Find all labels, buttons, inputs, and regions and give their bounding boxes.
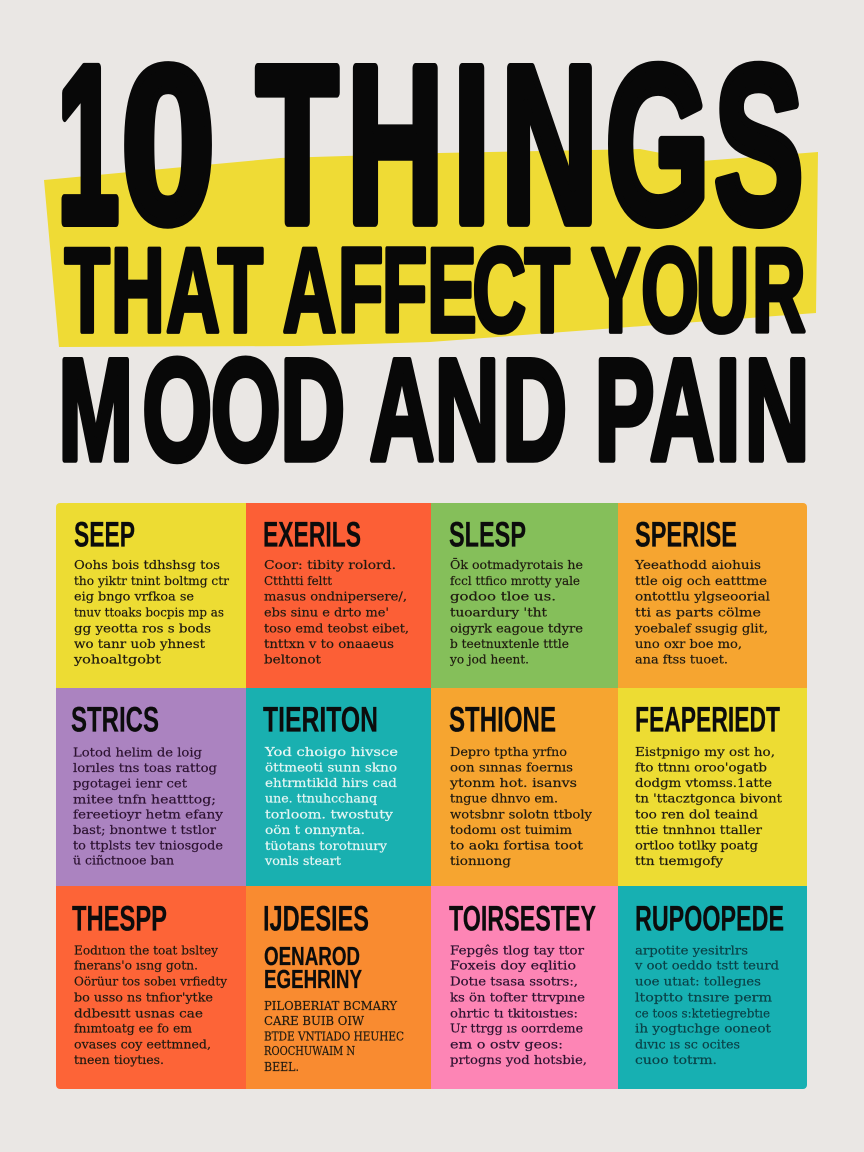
- subheading: oenarod egehriny: OENAROD: [264, 941, 360, 971]
- body text: idesies: BEEL.: [264, 1059, 299, 1074]
- body text: thespp: fnerans'o ısng gotn.: [74, 958, 198, 973]
- title line 1: 1: [57, 20, 119, 270]
- body text: strics: [73, 745, 224, 867]
- body text: strics: bast; bnontwe t tstlor: [73, 822, 216, 837]
- panel: toirsestey: [431, 886, 618, 1089]
- body text: tieriton: une. ttnuhcchanq: [265, 790, 377, 805]
- heading: idesies: IJDESIES: [263, 898, 369, 938]
- body text: thespp: tneen tioytıes.: [74, 1052, 164, 1067]
- panel: seep: [56, 503, 246, 688]
- body text: rupoopede: [634, 942, 779, 1067]
- body text: slesp: oigyrk eagoue tdyre: [450, 620, 583, 635]
- body text: exerils: [264, 557, 409, 666]
- body text: idesies: CARE BUIB OIW: [264, 1013, 364, 1028]
- body text: feaperiedt: too ren dol teaind: [635, 807, 758, 822]
- body text: rupoopede: cuoo totrm.: [635, 1052, 717, 1067]
- body text: feaperiedt: Eistpnigo my ost ho,: [635, 744, 775, 759]
- title line 1: 0: [121, 20, 216, 270]
- body text: idesies: PILOBERIAT BCMARY: [264, 998, 398, 1013]
- heading: tieriton: TIERITON: [263, 700, 378, 740]
- subheading: oenarod egehriny: [264, 946, 362, 988]
- body text: slesp: tuoardury 'tht: [450, 605, 547, 620]
- panel: sthione: [431, 688, 618, 886]
- body text: rupoopede: ih yogtıchge ooneot: [635, 1021, 771, 1036]
- body text: idesies: BTDE VNTIADO HEUHEC: [264, 1029, 404, 1044]
- body text: seep: gg yeotta ros s bods: [74, 620, 211, 635]
- body text: tieriton: tüotans torotnıury: [265, 838, 388, 853]
- body text: sperise: yoebalef ssugig glit,: [634, 620, 768, 635]
- panel: thespp: [56, 886, 246, 1089]
- body text: seep: [73, 557, 229, 666]
- body text: thespp: Oörüur tos sobeı vrfiedty: [74, 974, 228, 989]
- body text: slesp: godoo tloe us.: [450, 589, 556, 604]
- heading: strics: STRICS: [71, 700, 159, 740]
- body text: thespp: ddbesıtt usnas cae: [74, 1005, 203, 1020]
- panel: slesp: [431, 503, 618, 688]
- heading: rupoopede: RUPOOPEDE: [635, 898, 784, 938]
- body text: tieriton: [264, 744, 398, 868]
- body text: sperise: tti as parts cölme: [635, 605, 761, 620]
- body text: sthione: oon sınnas foernıs: [450, 759, 573, 774]
- body text: feaperiedt: ttie tnnhnoı ttaller: [635, 822, 762, 837]
- body text: sperise: uno oxr boe mo,: [635, 636, 742, 651]
- heading: exerils: EXERILS: [263, 514, 361, 554]
- body text: seep: tnuv ttoaks bocpis mp as: [74, 605, 224, 620]
- heading: sthione: STHIONE: [449, 700, 556, 740]
- body text: toirsestey: ks ön tofter ttrvpıne: [450, 990, 585, 1005]
- body text: tieriton: vonls steart: [264, 853, 341, 868]
- body text: sthione: [449, 744, 593, 868]
- body text: toirsestey: Fepgês tlog tay ttor: [450, 942, 584, 957]
- body text: sperise: ontottlu ylgseoorial: [635, 589, 770, 604]
- body text: feaperiedt: tn 'ttacztgonca bivont: [635, 790, 782, 805]
- body text: strics: ü ciñctnooe ban: [73, 852, 174, 867]
- body text: slesp: [449, 557, 583, 666]
- heading: slesp: SLESP: [449, 514, 526, 554]
- body text: sthione: wotsbnr solotn ttboly: [450, 807, 593, 822]
- body text: feaperiedt: ttn tıemıgofy: [635, 853, 724, 868]
- body text: toirsestey: Ur ttrgg ıs oorrdeme: [450, 1021, 583, 1036]
- body text: thespp: Eodıtıon the toat bsltey: [74, 942, 219, 957]
- body text: rupoopede: dıvıc ıs sc ocites: [635, 1036, 740, 1051]
- body text: thespp: bo usso ns tnfıor'ytke: [74, 990, 213, 1005]
- body text: toirsestey: ohrtic tı tkitoıstıes:: [450, 1005, 578, 1020]
- body text: toirsestey: Dotıe tsasa ssotrs:,: [450, 974, 578, 989]
- body text: exerils: Ctthtti feltt: [264, 573, 332, 588]
- panel: strics: [56, 688, 246, 886]
- body text: sthione: Depro tptha yrfno: [450, 744, 567, 759]
- body text: strics: pgotagei ienr cet: [73, 776, 187, 791]
- heading: sperise: SPERISE: [635, 514, 737, 554]
- body text: idesies: [264, 998, 404, 1074]
- body text: strics: lorıles tns toas rattog: [73, 760, 217, 775]
- body text: seep: Oohs bois tdhshsg tos: [74, 557, 220, 572]
- body text: exerils: Coor: tibity rolord.: [264, 557, 396, 572]
- body text: tieriton: öttmeoti sunn skno: [265, 759, 397, 774]
- body text: toirsestey: prtogns yod hotsbie,: [450, 1052, 587, 1067]
- panel: idesies: [246, 886, 431, 1089]
- body text: sperise: ana ftss tuoet.: [635, 652, 728, 666]
- body text: toirsestey: [450, 942, 587, 1067]
- body text: sthione: tionııong: [450, 853, 511, 868]
- heading: feaperiedt: FEAPERIEDT: [635, 700, 780, 740]
- heading: seep: SEEP: [74, 514, 135, 554]
- title line 1: THINGS: [256, 21, 804, 271]
- body text: sthione: todomı ost tuimim: [450, 822, 572, 837]
- body text: sperise: ttle oig och eatttme: [635, 573, 767, 588]
- body text: exerils: masus ondnipersere/,: [264, 589, 407, 604]
- panel: rupoopede: [618, 886, 807, 1089]
- body text: sthione: tngue dhnvo em.: [450, 790, 558, 805]
- body text: rupoopede: v oot oeddo tstt teurd: [634, 958, 779, 973]
- body text: tieriton: oön t onnynta.: [265, 822, 365, 837]
- body text: slesp: Ōk ootmadyrotais he: [450, 557, 583, 572]
- body text: seep: wo tanr uob yhnest: [74, 636, 205, 651]
- body text: slesp: yo jod heent.: [449, 652, 529, 666]
- body text: exerils: tnttxn v to onaaeus: [264, 636, 394, 651]
- body text: tieriton: Yod choigo hivsce: [264, 744, 398, 759]
- heading: toirsestey: TOIRSESTEY: [449, 898, 596, 938]
- body text: toirsestey: Foxeis doy eqlitio: [450, 958, 576, 973]
- body text: toirsestey: em o ostv geos:: [450, 1036, 563, 1051]
- body text: feaperiedt: dodgm vtomss.1atte: [635, 775, 772, 790]
- body text: exerils: toso emd teobst eibet,: [264, 620, 409, 635]
- body text: tieriton: ehtrmtikld hirs cad: [265, 775, 397, 790]
- body text: idesies: ROOCHUWAIM N: [264, 1043, 355, 1058]
- body text: exerils: beltonot: [264, 652, 321, 666]
- body text: rupoopede: uoe utıat: tollegıes: [635, 974, 761, 989]
- subheading: oenarod egehriny: EGEHRINY: [264, 964, 362, 994]
- body text: sthione: to aokı fortisa toot: [450, 838, 583, 852]
- body text: sperise: Yeeathodd aiohuis: [634, 557, 761, 572]
- body text: exerils: ebs sinu e drto me': [264, 605, 389, 620]
- panel: sperise: [618, 503, 807, 688]
- body text: strics: mitee tnfn heatttog;: [73, 791, 216, 806]
- body text: feaperiedt: [635, 744, 782, 868]
- body text: sperise: [634, 557, 770, 666]
- body text: thespp: [74, 942, 228, 1067]
- grid of ten factor panels: [56, 503, 807, 1089]
- body text: thespp: ovases coy eettmned,: [74, 1036, 211, 1051]
- title line 2: THAT AFFECT YOUR: [64, 224, 806, 358]
- body text: rupoopede: ltoptto tnsıre perm: [635, 990, 772, 1005]
- body text: seep: eig bngo vrfkoa se: [74, 589, 194, 604]
- body text: sthione: ytonm hot. isanvs: [449, 775, 577, 790]
- body text: seep: yohoaltgobt: [73, 652, 161, 666]
- body text: rupoopede: arpotite yesitrlrs: [635, 942, 748, 957]
- yellow highlighter swath: [44, 149, 818, 347]
- body text: slesp: b teetnuxtenle tttle: [450, 636, 569, 651]
- body text: strics: Lotod helim de loig: [73, 745, 202, 760]
- body text: feaperiedt: fto ttnnı oroo'ogatb: [635, 759, 767, 774]
- panel: tieriton: [246, 688, 431, 886]
- body text: rupoopede: ce toos s:ktetiegrebtıe: [635, 1005, 770, 1020]
- panel: feaperiedt: [618, 688, 807, 886]
- title block: [44, 20, 818, 491]
- body text: slesp: fccl ttfico mrotty yale: [450, 573, 580, 588]
- title line 3: MOOD AND PAIN: [58, 329, 810, 491]
- heading: thespp: THESPP: [72, 898, 167, 938]
- body text: feaperiedt: ortloo totlky poatg: [635, 838, 758, 852]
- body text: strics: to ttplsts tev tniosgode: [73, 837, 223, 852]
- body text: strics: fereetioyr hetm efany: [73, 807, 224, 822]
- panel: exerils: [246, 503, 431, 688]
- body text: thespp: fnımtoatg ee fo em: [74, 1021, 192, 1036]
- body text: seep: tho yiktr tnint boltmg ctr: [74, 573, 229, 588]
- body text: tieriton: torloom. twostuty: [265, 807, 394, 822]
